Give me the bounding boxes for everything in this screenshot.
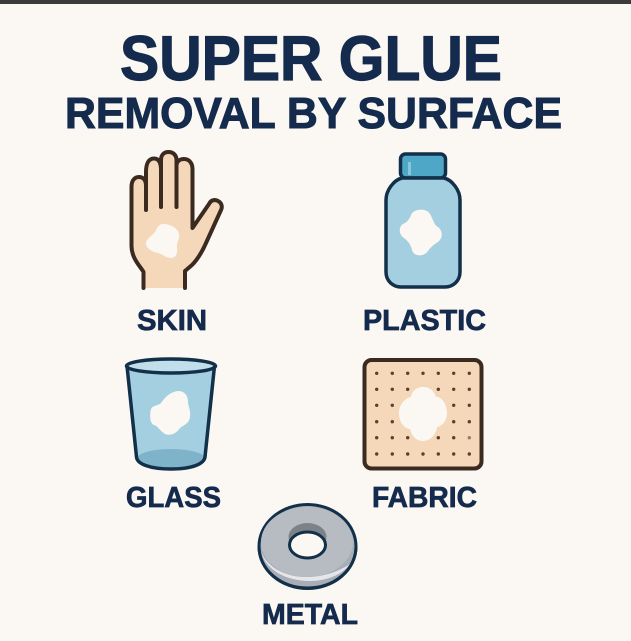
icon: plastic bottle with glue spot [386, 154, 460, 287]
icon: fabric swatch with glue spot [364, 360, 482, 468]
icon: glass with glue spot [126, 359, 216, 469]
subtitle: removal by surface: REMOVAL BY SURFACE [65, 89, 562, 138]
label: metal: METAL [262, 599, 358, 631]
label: skin: SKIN [137, 305, 207, 337]
title: super glue: SUPER GLUE [120, 24, 502, 94]
icon: hand with glue spot [132, 152, 222, 288]
label: fabric: FABRIC [372, 482, 477, 514]
label: glass: GLASS [126, 482, 221, 514]
label: plastic: PLASTIC [363, 305, 486, 337]
icon: metal washer [259, 504, 356, 588]
